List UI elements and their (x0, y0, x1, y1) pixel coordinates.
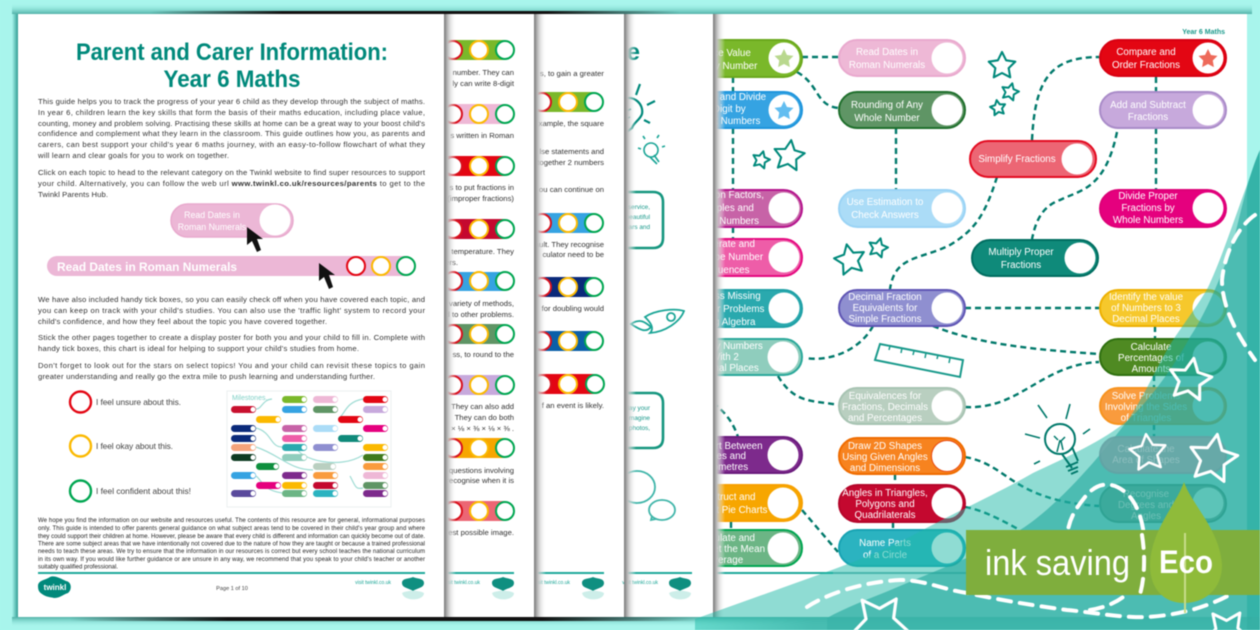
star (1000, 81, 1021, 101)
header label: Year 6 Maths (1182, 29, 1225, 36)
pill: solve problems (1100, 388, 1226, 424)
icon: cursor (319, 263, 335, 289)
pill: mean average: Average (707, 555, 744, 566)
key: unsure: I feel unsure about this. (96, 397, 181, 407)
footer rule (38, 572, 425, 574)
pill: common factors: Common Factors, (686, 190, 764, 201)
page number: Page 1 of 10 (216, 586, 248, 592)
icon: rocket (631, 310, 684, 333)
sample topic pill (171, 204, 293, 237)
traffic light row (533, 92, 603, 112)
stars paragraph (38, 361, 425, 381)
star (844, 584, 919, 630)
third column pills (970, 141, 1098, 276)
star (1128, 432, 1168, 470)
pill: pie charts (716, 483, 804, 523)
tick box paragraph: We have also included handy tick boxes, so you can easily check off when you have covered each topic, and (38, 295, 425, 304)
pill: multiply decimals (717, 337, 804, 377)
pill: place value: Place Value (699, 48, 751, 59)
traffic light row (444, 219, 514, 239)
pill: rounding: Rounding of Any (851, 100, 923, 111)
pill: multiply fractions: Fractions (1001, 260, 1041, 271)
pill: estimation: Check Answers (851, 210, 919, 221)
pill: circle parts (839, 530, 965, 566)
pill: simplify: Simplify Fractions (978, 154, 1056, 165)
intro paragraph (37, 97, 425, 160)
star (1198, 601, 1258, 630)
banner: ink saving eco (966, 482, 1260, 613)
pill: percentages: Amounts (1132, 364, 1170, 375)
pill: compare fractions (1100, 40, 1226, 76)
pill: equivalences: Equivalences for (849, 391, 922, 402)
pill: solve problems: Solve Problems (1112, 391, 1180, 402)
title: Year 6 Maths (164, 66, 300, 93)
pill: compare fractions: Order Fractions (1112, 60, 1180, 71)
pill: divide fractions: Fractions by (1121, 203, 1175, 214)
pill: decimal fractions: Decimal Fraction (848, 292, 922, 303)
poster thumbnail (227, 391, 391, 507)
text fragments: s to put fractions in (449, 183, 514, 192)
pill: 2D shapes (839, 438, 965, 474)
right column pills (1100, 40, 1226, 424)
icon: eco badge (402, 577, 424, 599)
pill: multiply fractions (972, 240, 1098, 276)
pill: recognise degrees (under overlay) (1100, 485, 1226, 522)
disclaimer: We hope you find the information on our website and resources useful. The contents of this resource are for general, informational purposes (38, 518, 425, 524)
text fragments: lse statements and (539, 147, 604, 156)
key: okay: I feel okay about this. (96, 441, 173, 451)
text fragments (445, 68, 515, 537)
text fragments: culator need to be (542, 250, 604, 259)
text fragments: temperature. They (451, 247, 514, 256)
pill: place value (716, 38, 804, 79)
pill: angles (839, 485, 965, 522)
pill: identify value (1100, 290, 1226, 326)
intro paragraph: will learn and clear goals for you to work on together. (37, 151, 229, 160)
pill: common factors: Prime Numbers (691, 216, 759, 227)
pill: pie charts: Interpret Pie Charts (683, 505, 768, 516)
pill: multiply fractions: Multiply Proper (988, 247, 1054, 258)
traffic light row (533, 277, 603, 297)
footers of inner sheets (444, 572, 833, 599)
page 4: sheet (617, 14, 713, 617)
disclaimer: only. This guide is intended to offer parents general guidance on what subject areas tend to be covered in their child's year group and where (38, 526, 426, 532)
callout box (624, 192, 663, 248)
key: okay (70, 436, 173, 456)
pill: decimal fractions: Simple Fractions (849, 314, 922, 325)
key: confident (70, 480, 191, 502)
text fragments: d to other problems. (446, 310, 514, 319)
icon: ruler (875, 344, 963, 377)
pill: multiply and divide: Multiply and Divide (684, 92, 767, 103)
pill: solve problems: of Triangles (1121, 413, 1171, 424)
right edge band (1254, 160, 1256, 166)
pill: roman numerals (839, 40, 965, 76)
pill: recognise degrees (under overlay): Recognise (1123, 489, 1170, 500)
traffic light row (444, 375, 514, 395)
traffic light row (533, 213, 603, 233)
pill: mean average: Calculate and (695, 533, 755, 544)
icon: leaf drop (1150, 482, 1222, 603)
pill: decimal fractions: Equivalents for (853, 303, 918, 314)
callout box: magine (629, 415, 650, 422)
icon: speech bubbles (619, 471, 675, 520)
text fragments: for doubling would (542, 304, 604, 313)
pill: convert miles: Convert Between (687, 441, 763, 452)
text fragments: They can also add (451, 402, 514, 411)
click paragraph (38, 168, 426, 199)
pill: multiply decimals: Decimal Places (691, 363, 759, 374)
logo: twinkl (38, 576, 71, 598)
intro paragraph: This guide helps you to track the progress of your year 6 child as they develop through the subject of maths. (38, 97, 425, 106)
page 2: sheet (444, 14, 534, 617)
pill: 2D shapes: Draw 2D Shapes (848, 441, 922, 452)
pill: common factors: Multiples and (696, 203, 754, 214)
disclaimer: There are some subject areas that we have intentionally not covered due to the nature of how they are taught or because a trained professional (38, 542, 425, 548)
pill: mean average: Interpret the Mean (685, 544, 765, 555)
pill: calculate area (under overlay): Area of Shapes (1112, 455, 1180, 466)
intro paragraph: confidence and complement what they learn in the classroom. This guide outlines how you, as parents and (38, 129, 425, 138)
star (989, 52, 1015, 77)
text fragments: variety of methods, (449, 299, 514, 308)
icon: big bulb (624, 84, 655, 134)
pill: roman numerals: Roman Numerals (849, 60, 925, 71)
text: ink saving: ink saving (985, 542, 1130, 583)
overlay: dark teal swoosh (827, 150, 1260, 630)
pill: convert miles: Kilometres (702, 462, 748, 473)
click paragraph: Click on each topic to head to the relevant category on the Twinkl website to find super resources to support (38, 168, 426, 177)
pill: angles: Polygons and (855, 499, 915, 510)
bottom band (700, 617, 1260, 630)
pill: rounding (839, 92, 965, 128)
pill: identify value: of Numbers to 3 (1111, 303, 1181, 314)
traffic light row (444, 272, 514, 291)
sample checklist bar: Read Dates in Roman Numerals (57, 260, 237, 274)
pill: calculate area (under overlay) (1100, 437, 1226, 473)
text fragments: est possible image. (448, 528, 514, 537)
left column pills (716, 38, 804, 568)
pill: calculate area (under overlay): Calculate the (1117, 444, 1175, 455)
pill: percentages (1100, 339, 1226, 375)
pill: multiply and divide: 2-Digit Numbers (690, 116, 760, 127)
sample checklist bar (47, 256, 415, 276)
key: unsure (70, 392, 181, 412)
disclaimer: in its own way. If you would like further guidance or are unsure in any way, we recommend that you speak to your child's teacher or another (38, 557, 425, 563)
intro paragraph: counting, money and problem solving. Practising these skills at home can be a great way to your boost child's (38, 119, 425, 128)
white dashed loop (1068, 485, 1144, 610)
pill: place value: of Any Number (693, 61, 758, 72)
text: eco: Eco (1159, 544, 1213, 580)
pill: rounding: Whole Number (854, 113, 920, 124)
icon: small bulb (638, 135, 665, 164)
pill: identify value: Decimal Places (1112, 314, 1180, 325)
logo: twinkl: twinkl (44, 583, 66, 592)
callout box: lay your (628, 405, 651, 412)
footers of inner sheets: visit twinkl.co.uk (534, 580, 570, 586)
pill: common factors (716, 188, 804, 229)
traffic light row (444, 501, 514, 521)
pill: add subtract: Fractions (1128, 112, 1168, 123)
poster paragraph: handy tick boxes, this chart is ideal for helping to support your child's studies from home. (38, 344, 359, 353)
pill: recognise degrees (under overlay): Degrees and (1118, 500, 1174, 511)
tick box paragraph: you can keep on track with your child's studies. You can also use the 'traffic light' system to record your (38, 306, 425, 315)
sample topic pill: Read Dates in (184, 210, 240, 220)
callout box: photos, (629, 425, 650, 432)
pill: estimation (839, 190, 965, 227)
overlay: light teal swoosh (695, 150, 1260, 630)
text fragments: s written in Roman (450, 131, 514, 140)
pill: 2D shapes: Using Given Angles (842, 452, 928, 463)
text fragments: f an event is likely. (542, 401, 604, 410)
pill: generate sequences: Generate and (695, 239, 755, 250)
leaf vein (1184, 533, 1186, 613)
pill: recognise degrees (under overlay): Angles (1131, 511, 1161, 522)
visit link: visit twinkl.co.uk (355, 580, 391, 586)
pill: estimation: Use Estimation to (847, 197, 924, 208)
text fragments: xample, the square (539, 119, 604, 128)
pill: generate sequences: Describe Number (687, 252, 764, 263)
pill: percentages: Calculate (1131, 342, 1172, 353)
traffic light row (444, 324, 514, 344)
text fragments: (improper fractions) (447, 194, 514, 203)
text fragments: ault. They recognise (535, 240, 604, 249)
footer line continued (833, 572, 966, 574)
pill: missing number (717, 288, 804, 329)
traffic light row (444, 438, 514, 458)
pill: divide fractions: Whole Numbers (1113, 215, 1183, 226)
title: Parent and Carer Information: (76, 39, 388, 66)
page 5: flowchart sheet (660, 14, 1247, 617)
text fragments: number. They can (453, 68, 514, 77)
title (76, 39, 388, 93)
disclaimer: needs to teach these areas. We try to ensure that the information in our resources is correct but every school teaches the national curriculum (38, 549, 425, 555)
pill: circle parts: Name Parts (859, 538, 911, 549)
tick box paragraph: child's confidence, and how they feel about the topic you have covered together. (38, 317, 327, 326)
click paragraph: your child. Alternatively, you can follow the web url www.twinkl.co.uk/resources/parents to get to the (38, 179, 425, 188)
traffic light row (533, 374, 604, 394)
pill: equivalences (839, 388, 965, 424)
pill: circle parts: of a Circle (863, 550, 908, 561)
pill: percentages: Percentages of (1118, 353, 1184, 364)
sheet edge shadows (444, 14, 725, 617)
text fragments: ou can continue on (539, 185, 604, 194)
text fragments: s, to gain a greater (540, 69, 604, 78)
disclaimer: suitably qualified professional. (38, 564, 118, 570)
pill: generate sequences (716, 237, 804, 278)
white dashes over banner (1138, 535, 1144, 600)
pill: multiply and divide: 4-Digit by (704, 104, 746, 115)
star (989, 99, 1007, 116)
stars paragraph: greater understanding and really go the extra mile to push learning and understanding further. (38, 372, 375, 381)
callout box: ears and (625, 224, 650, 231)
pill: pie charts: Construct and (694, 492, 756, 503)
traffic light row (444, 40, 514, 60)
page 1: parent and carer information (18, 14, 444, 617)
text fragments: recognise when it is (446, 476, 514, 485)
pill: angles: Quadrilaterals (854, 510, 916, 521)
page 3: sheet (533, 14, 624, 617)
pill: decimal fractions (839, 290, 965, 326)
footers of inner sheets: visit twinkl.co.uk (622, 580, 658, 586)
poster thumbnail: Milestones... (232, 395, 271, 402)
text fragments: ly can write 8-digit (452, 79, 515, 88)
pill: add subtract (1100, 92, 1226, 128)
star (772, 138, 806, 171)
text fragments: They can do both (455, 413, 514, 422)
pill: missing number: Number Problems (686, 304, 765, 315)
sample topic pill: Roman Numerals (178, 222, 247, 232)
text fragments: questions involving (449, 466, 514, 475)
text fragments: together 2 numbers (537, 158, 604, 167)
star (1186, 430, 1241, 483)
text fragments (535, 69, 604, 410)
middle column pills (839, 40, 965, 566)
icon: cursor (247, 227, 263, 252)
disclaimer (38, 518, 426, 570)
traffic light row (533, 331, 603, 351)
callout box: service, (628, 204, 650, 211)
pill: convert miles (716, 435, 804, 475)
star (832, 241, 868, 276)
callout box (624, 393, 663, 448)
pill: 2D shapes: and Dimensions (850, 463, 920, 474)
pill: missing number: Using Algebra (694, 317, 756, 328)
pill: generate sequences: Sequences (700, 265, 750, 276)
white dashed trail (1222, 215, 1255, 360)
icon: light bulb (1025, 404, 1090, 474)
traffic light row (444, 104, 514, 124)
pill: divide fractions: Divide Proper (1118, 191, 1178, 202)
tick box paragraph (38, 295, 425, 326)
poster paragraph: Stick the other pages together to create a display poster for both you and your child to fill in. Complete with (38, 333, 425, 342)
pill: identify value: Identify the value (1109, 292, 1184, 303)
pill: mean average (716, 528, 804, 568)
pill: compare fractions: Compare and (1116, 47, 1176, 58)
pill: angles: Angles in Triangles, (842, 488, 928, 499)
pill: solve problems: Involving the Sides (1105, 402, 1187, 413)
pill: roman numerals: Read Dates in (856, 47, 918, 58)
pill: multiply and divide (716, 90, 804, 130)
callout box: beautiful (626, 214, 650, 221)
title fragment: re (617, 39, 640, 66)
pill: multiply decimals: Multiply Numbers (687, 341, 763, 352)
text fragments: ss, to round to the (452, 350, 514, 359)
star (867, 236, 890, 258)
poster paragraph (38, 333, 425, 353)
pill: add subtract: Add and Subtract (1110, 100, 1186, 111)
pill: multiply decimals: With 2 (711, 352, 739, 363)
star (1166, 355, 1214, 401)
disclaimer: they could support their children at home. However, please be aware that every child is different and information can quickly become out of date. (38, 534, 425, 540)
stars paragraph: Don't forget to look out for the stars on select topics! You and your child can revisit these topics to gain (38, 361, 425, 370)
pill: divide fractions (1100, 190, 1226, 227)
star (751, 149, 772, 169)
footers of inner sheets: visit twinkl.co.uk (444, 580, 480, 586)
pill: missing number: Express Missing (689, 291, 761, 302)
intro paragraph: carers, can best support your child's year 6 maths journey, with an easy-to-follow flowchart of what they (38, 140, 425, 149)
teal stars (751, 52, 1021, 276)
key: confident: I feel confident about this! (96, 486, 191, 496)
click paragraph: Twinkl Parents Hub. (38, 190, 108, 199)
intro paragraph: In year 6, children learn the key skills that form the basis of their maths education, including place value, (38, 108, 425, 117)
connectors (713, 57, 1156, 552)
text fragments: × ⅛ × ⅜ × ⅛ × ⅜ . (451, 424, 514, 433)
traffic light row (444, 156, 514, 176)
pill: equivalences: Fractions, Decimals (842, 402, 928, 413)
text fragments: ers. (445, 258, 458, 267)
white dashed path (807, 570, 1260, 617)
white stars (844, 355, 1258, 630)
pill: convert miles: Miles and (704, 451, 746, 462)
pill: equivalences: and Percentages (848, 413, 922, 424)
